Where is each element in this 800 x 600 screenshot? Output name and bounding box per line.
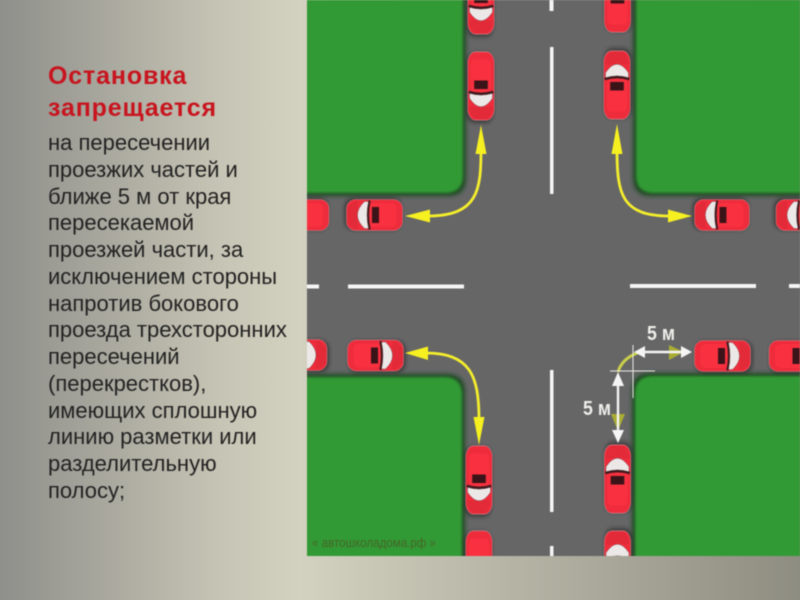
- arrow: yellow bottom left: [405, 346, 484, 445]
- body text: пересечений: [48, 344, 180, 369]
- arrow: yellow top left: [405, 125, 486, 222]
- heading: [48, 62, 217, 122]
- parked cars top left: [271, 0, 494, 231]
- arrow: curved 5 m corner: [610, 345, 684, 431]
- dimension arrow vertical 5 m: [612, 372, 624, 443]
- panel: green block bottom right: [632, 373, 800, 566]
- heading: Остановка: [48, 62, 187, 90]
- body text: полосу;: [48, 478, 125, 503]
- lane markings: [307, 0, 800, 556]
- panel: green block top right: [633, 0, 800, 196]
- watermark: « автошколадома.рф »: [312, 535, 436, 550]
- body text: исключением стороны: [48, 264, 277, 289]
- body text: пересекаемой: [48, 210, 194, 235]
- intersection diagram: [306, 0, 800, 557]
- body text: проезда трехсторонних: [48, 317, 287, 342]
- road: [307, 0, 800, 556]
- parked cars bottom left: [271, 340, 492, 600]
- heading: запрещается: [48, 94, 217, 122]
- panel: green block top left: [300, 0, 466, 196]
- parked cars top right: [604, 0, 800, 231]
- arrow: yellow top right: [612, 124, 692, 222]
- body text: ближе 5 м от края: [48, 184, 231, 209]
- body text: проезжих частей и: [48, 157, 238, 182]
- body text: на пересечении: [48, 130, 210, 155]
- panel: green block bottom left: [300, 374, 465, 566]
- body text: [48, 130, 287, 504]
- label: 5 m vertical: 5 м: [583, 398, 611, 420]
- body text: (перекрестков),: [48, 371, 206, 396]
- dimension arrow horizontal 5 m: [634, 346, 692, 358]
- body text: разделительную: [48, 451, 217, 476]
- label: 5 m horizontal: 5 м: [647, 323, 675, 345]
- parked cars bottom right: [604, 340, 800, 599]
- body text: проезжей части, за: [48, 237, 243, 262]
- body text: линию разметки или: [48, 424, 257, 449]
- body text: имеющих сплошную: [48, 398, 257, 423]
- body text: напротив бокового: [48, 291, 239, 316]
